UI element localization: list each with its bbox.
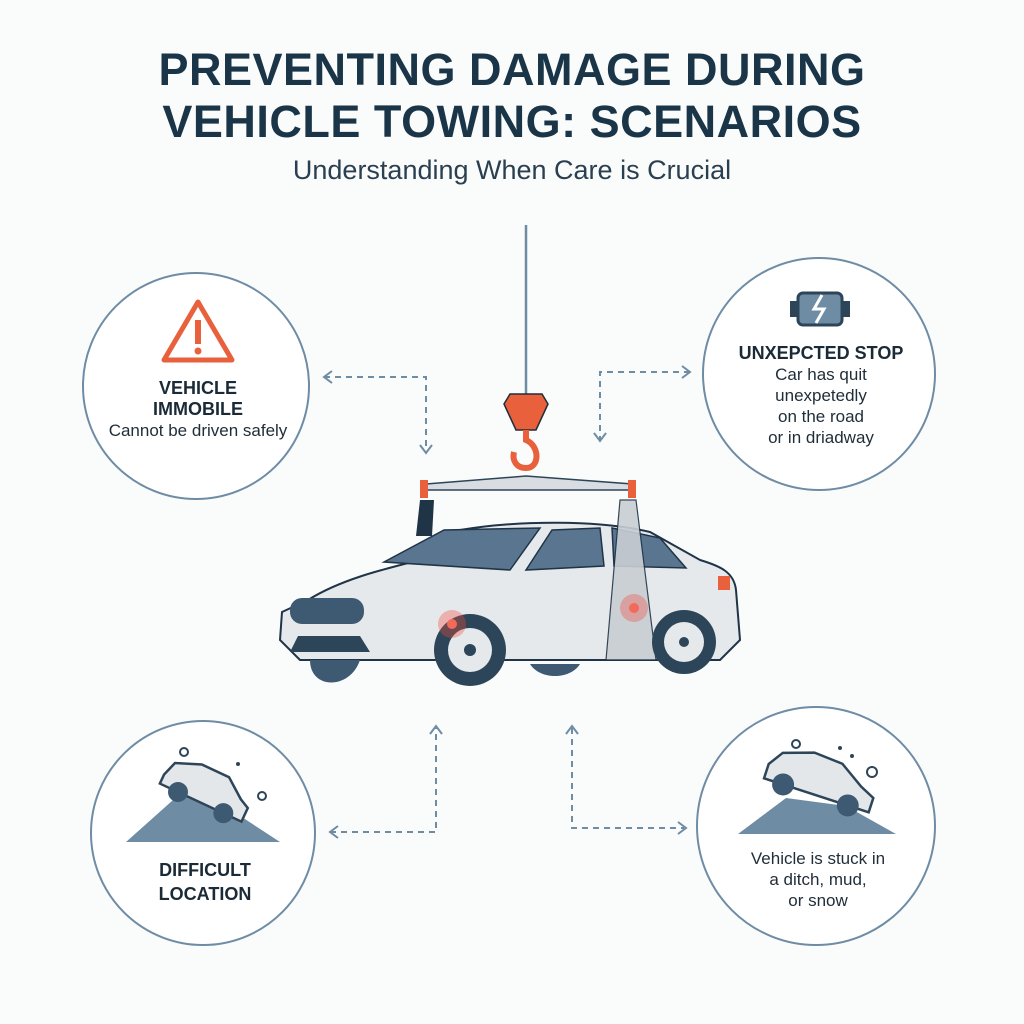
text: on the road: [778, 407, 864, 426]
text: or in driadway: [768, 428, 874, 447]
text: [739, 343, 903, 447]
subtitle: Understanding When Care is Crucial: [293, 155, 731, 185]
icon: engine: [790, 292, 850, 326]
text: [109, 378, 288, 440]
icon: car on snow: [738, 739, 896, 834]
text: a ditch, mud,: [769, 870, 867, 889]
text: LOCATION: [159, 884, 251, 904]
text: [159, 860, 251, 904]
text: UNXEPCTED STOP: [739, 343, 903, 363]
text: IMMOBILE: [153, 399, 243, 419]
text: [751, 849, 885, 910]
icon: car on snow: [126, 747, 280, 842]
text: Vehicle is stuck in: [751, 849, 885, 868]
title: [158, 44, 866, 147]
panel: difficult location: [90, 720, 316, 946]
text: unexpetedly: [775, 386, 867, 405]
text: DIFFICULT: [159, 860, 251, 880]
panel: vehicle immobile: [82, 272, 310, 500]
title: VEHICLE TOWING: SCENARIOS: [162, 96, 862, 147]
panel: unexpected stop: [702, 257, 936, 491]
text: or snow: [788, 891, 848, 910]
text: Car has quit: [775, 365, 867, 384]
icon: warning: [162, 300, 234, 362]
text: Cannot be driven safely: [109, 421, 287, 440]
panel: stuck: [696, 706, 936, 946]
title: PREVENTING DAMAGE DURING: [158, 44, 866, 95]
text: VEHICLE: [159, 378, 237, 398]
